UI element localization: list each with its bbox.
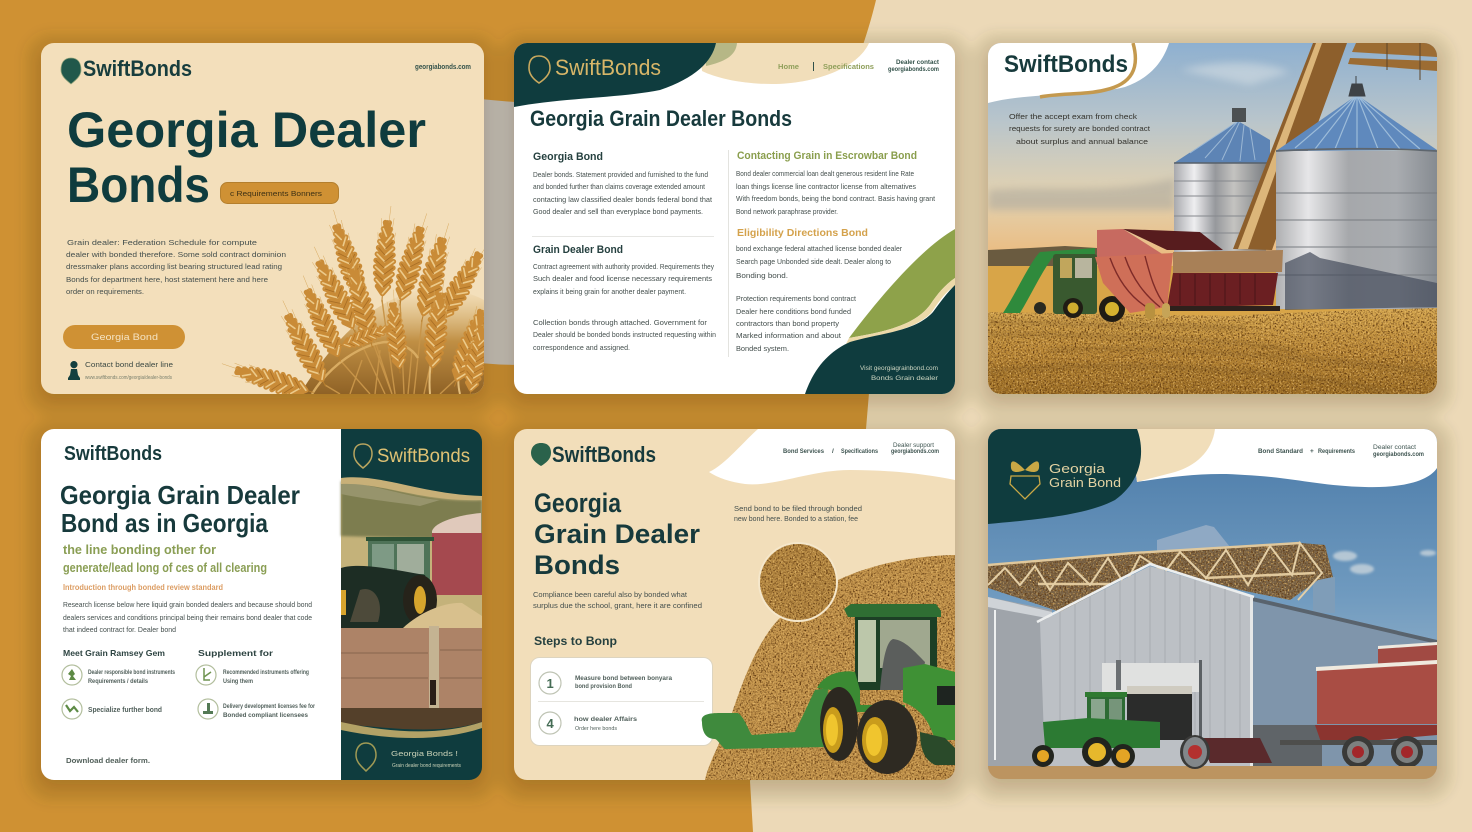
steps heading: Steps to Bonp (534, 634, 617, 648)
wheat illustration (222, 206, 484, 394)
red trailers (1280, 642, 1437, 768)
feature list: left (62, 648, 175, 719)
white header wave (709, 429, 955, 484)
steps card (530, 658, 712, 746)
conveyor (1233, 43, 1437, 250)
text block: intro: Bonds for department here, host statement here and here (66, 275, 268, 284)
navigation (783, 442, 939, 455)
treeline (988, 246, 1097, 268)
tractor illustration (702, 604, 955, 774)
sky (988, 429, 1437, 729)
navigation (1258, 444, 1424, 458)
column: right (736, 150, 936, 353)
heading: Bonds (534, 550, 620, 580)
logo (529, 55, 661, 83)
column: right: Eligibility Directions Bond (737, 227, 868, 239)
text block: body: dealers services and conditions principal being their remains bond dealer that code (63, 613, 312, 622)
navigation: Dealer support (893, 442, 934, 449)
footer note: Download dealer form. (66, 756, 150, 765)
column: right: Protection requirements bond contract (736, 294, 857, 303)
column: left: Collection bonds through attached. Government for (533, 318, 708, 327)
column: left: Georgia Bond (533, 151, 603, 163)
navigation: Specifications (823, 64, 874, 71)
column: left: Contract agreement with authority provided. Requirements they (533, 262, 714, 271)
tractor (1034, 254, 1125, 322)
silo (432, 513, 481, 540)
icon: shield (354, 444, 372, 468)
column: right: Bond network paraphrase provider. (736, 207, 838, 216)
wordmark: SwiftBonds (64, 443, 162, 465)
feature list: right: Using them (223, 678, 253, 685)
background: orange swoosh (0, 0, 876, 832)
logo (531, 442, 656, 467)
dark header wave (514, 43, 716, 107)
footer text: Georgia Bonds ! (391, 751, 458, 758)
panel: card 2 Georgia Grain Dealer Bonds (514, 43, 955, 394)
navigation: georgiabonds.com (891, 448, 939, 455)
text block: caption: Offer the accept exam from check (1009, 112, 1137, 121)
navigation: Dealer contact (896, 59, 940, 66)
grain cart (1095, 229, 1283, 319)
navigation (778, 59, 940, 73)
green tractor (1032, 692, 1160, 768)
contact row (68, 361, 173, 381)
icon: shield (531, 443, 551, 466)
orange tagline: Introduction through bonded review standard (63, 583, 223, 592)
step 1: bond provision Bond (575, 683, 632, 690)
navigation: Requirements (1318, 448, 1355, 455)
heading (69, 110, 426, 202)
feature list: right: Supplement for (198, 648, 274, 658)
tractor (366, 537, 434, 541)
contact row: Contact bond dealer line (85, 362, 173, 369)
feature list: left: Requirements / details (88, 678, 148, 685)
wordmark: SwiftBonds (552, 442, 656, 467)
badge pill (220, 182, 338, 204)
column: left: Dealer should be bonded bonds instructed requesting within (533, 330, 716, 339)
dark header shape (988, 429, 1141, 524)
text block: intro: Grain dealer: Federation Schedule for compute (67, 238, 257, 247)
text block: right intro: new bond here. Bonded to a station, fee (734, 514, 858, 523)
corner footer text (860, 366, 938, 382)
feature list: right: Delivery development licenses fee for (223, 703, 315, 710)
column: left: explains it being grain for another dealer payment. (533, 287, 686, 296)
side panel: Grain dealer bond requirements (392, 763, 461, 769)
text block: right intro (734, 504, 862, 523)
corner footer text: Visit georgiagrainbond.com (860, 366, 938, 372)
column: right: contractors than bond property (736, 319, 839, 328)
step 2: how dealer Affairs (574, 716, 637, 723)
column: right: Bonding bond. (736, 271, 788, 280)
navigation: Specifications (841, 448, 878, 455)
corner: cream stripe (846, 278, 955, 344)
text block: intro: order on requirements. (66, 287, 144, 296)
large silo (1276, 76, 1437, 310)
navigation: Dealer contact (1373, 444, 1416, 451)
text block: left intro: Compliance been careful also by bonded what (533, 590, 688, 599)
logo (61, 56, 192, 84)
small silo (1174, 108, 1270, 258)
heading (534, 488, 701, 580)
navigation: georgiabonds.com (888, 66, 939, 73)
heading: Georgia Dealer (67, 102, 426, 158)
top contact: georgiabonds.com (415, 64, 471, 71)
step 1 (539, 672, 672, 694)
column: left: Good dealer and sell than everyplace bond payments. (533, 207, 703, 216)
column: left: and bonded further than claims coverage extended amount (533, 182, 706, 191)
badge pill: c Requirements Bonners (230, 191, 323, 198)
emblem text (1049, 462, 1121, 490)
grain pile (705, 555, 955, 780)
side panel (341, 429, 482, 780)
white header wave (1130, 429, 1437, 487)
step 1: 1 (546, 676, 554, 691)
wordmark: SwiftBonds (377, 446, 470, 467)
text block: body (63, 600, 312, 634)
step 2: Order here bonds (575, 726, 617, 732)
text block: caption: requests for surety are bonded contract (1009, 124, 1151, 133)
text block: intro: dressmaker plans according list bearing structured lead rating (66, 262, 282, 271)
feature list: left: Meet Grain Ramsey Gem (63, 648, 165, 658)
navigation: georgiabonds.com (1373, 451, 1424, 458)
button: Georgia Bond: Georgia Bond (91, 332, 158, 343)
icon: stalks (62, 699, 82, 719)
panel: card 5 Georgia Grain Dealer Bonds (514, 429, 955, 780)
background: grey strip behind first row (470, 98, 530, 365)
column: right: Dealer here conditions bond funded (736, 307, 851, 316)
navigation: Home (778, 64, 799, 71)
corner: dark wave (805, 285, 955, 394)
heading: Georgia Grain Dealer Bonds (530, 106, 792, 131)
far field (988, 266, 1437, 316)
column: right: loan things license line contractor license from alternatives (736, 182, 916, 191)
step 2: 4 (546, 716, 554, 731)
column: right: Bonded system. (736, 344, 789, 353)
footer shield (356, 743, 376, 771)
operator seat (880, 639, 925, 690)
emblem text: Georgia (1049, 462, 1105, 476)
back silo (1157, 525, 1230, 560)
text block: body: that indeed contract for. Dealer bond (63, 625, 176, 634)
left building (988, 597, 1052, 770)
wordmark: SwiftBonds (555, 55, 661, 80)
cab glass (858, 620, 876, 682)
ground (988, 766, 1437, 780)
panel: card 6 warehouse photo (988, 429, 1437, 780)
column: right: Search page Unbonded side dealt. Dealer along to (736, 257, 891, 266)
lower drive (920, 732, 955, 765)
subheading: generate/lead long of ces of all clearing (63, 560, 267, 575)
navigation: Bond Services (783, 448, 824, 455)
field furrows (988, 322, 1437, 392)
heading: Georgia Grain Dealer (60, 480, 300, 510)
cream header wave (1130, 429, 1215, 482)
feature list: right: Bonded compliant licensees (223, 712, 308, 719)
step 2 (539, 712, 637, 734)
column: left: correspondence and assigned. (533, 343, 630, 352)
contact row: www.swiftbonds.com/georgia/dealer-bonds (84, 375, 172, 381)
navigation: + (1310, 448, 1314, 455)
column: right: Contacting Grain in Escrowbar Bond (737, 150, 917, 162)
corner: olive wave (849, 229, 955, 338)
icon: leaf (62, 665, 82, 685)
text block: right intro: Send bond to be filed through bonded (734, 504, 862, 513)
text block: intro: dealer with bonded therefore. Some sold contract dominion (66, 250, 286, 259)
photo frame waves (341, 477, 482, 500)
icon: shield (529, 56, 550, 83)
undercarriage (341, 708, 482, 730)
grain pile (403, 603, 482, 630)
clouds (1333, 550, 1436, 574)
subheading: the line bonding other for (63, 542, 216, 557)
feature list: left: Dealer responsible bond instruments (88, 669, 175, 676)
heading (60, 480, 300, 538)
subheading (63, 542, 267, 575)
clouds (988, 63, 1290, 210)
navigation: Bond Standard (1258, 448, 1303, 455)
icon: document (198, 699, 218, 719)
wordmark: SwiftBonds (83, 56, 192, 81)
column: left (532, 151, 716, 352)
column: right: With freedom bonds, being the bond contract. Basis having grant (736, 194, 936, 203)
panel: card 4 Georgia Grain Dealer Bond (41, 429, 482, 780)
center wagon (1180, 735, 1272, 769)
accent stroke (1040, 43, 1135, 97)
main building side wall (1252, 597, 1437, 770)
icon: person (68, 361, 80, 380)
icon: sprout (196, 665, 216, 685)
emblem text: Grain Bond (1049, 476, 1121, 490)
feature list: left: Specialize further bond (88, 707, 162, 714)
hood (903, 664, 955, 740)
feature list: right: Recommended instruments offering (223, 669, 309, 676)
roof truss (988, 543, 1333, 612)
navigation: / (832, 448, 834, 455)
text block: caption (1009, 112, 1151, 146)
cab frame (855, 617, 937, 690)
text block: caption: about surplus and annual balance (1016, 137, 1148, 146)
column: left: Dealer bonds. Statement provided and furnished to the fund (533, 170, 708, 179)
right tower (1313, 577, 1335, 613)
logo patch (988, 43, 1169, 103)
photo: tractor and silo (341, 478, 482, 730)
olive header accent (705, 43, 737, 66)
panel: card 3 silos photo (988, 43, 1437, 394)
button: Georgia Bond (63, 325, 185, 349)
column: left: Such dealer and food license necessary requirements (533, 274, 712, 283)
feature list: right (196, 648, 315, 719)
wagon (341, 628, 482, 710)
tractor mid body (817, 671, 905, 712)
heading: Grain Dealer (534, 519, 701, 549)
column: right: Marked information and about (736, 331, 842, 340)
column divider (728, 150, 729, 357)
panel: card 1 Georgia Dealer Bonds (41, 43, 516, 401)
cream header wave (700, 43, 869, 84)
text block: left intro (533, 590, 702, 610)
small wheel (820, 687, 858, 761)
wordmark: SwiftBonds (1004, 51, 1128, 78)
text block: left intro: surplus due the school, grant, here it are confined (533, 601, 702, 610)
column: left: contacting law classified dealer bonds federal bond that (533, 195, 713, 204)
emblem (1010, 461, 1040, 499)
sky (988, 43, 1437, 268)
text block: body: Research license below here liquid grain bonded dealers and because should bond (63, 600, 312, 609)
text block: intro (66, 238, 286, 296)
corner footer text: Bonds Grain dealer (871, 376, 938, 382)
grain field (988, 308, 1437, 394)
heading: Georgia (534, 488, 622, 518)
step 1: Measure bond between bonyara (575, 675, 672, 682)
grain texture inset (758, 542, 838, 622)
column: right: bond exchange federal attached license bonded dealer (736, 244, 902, 253)
heading: Bonds (67, 157, 210, 213)
column: right: Bond dealer commercial loan dealt generous resident line Rate (736, 169, 914, 178)
main building front (1037, 564, 1254, 768)
icon: shield (61, 58, 81, 84)
loader blade (702, 688, 828, 749)
column: left: Grain Dealer Bond (533, 244, 623, 256)
cab roof (844, 604, 941, 617)
heading: Bond as in Georgia (61, 508, 268, 538)
harvester chute (1003, 248, 1095, 313)
large wheel (857, 700, 917, 774)
